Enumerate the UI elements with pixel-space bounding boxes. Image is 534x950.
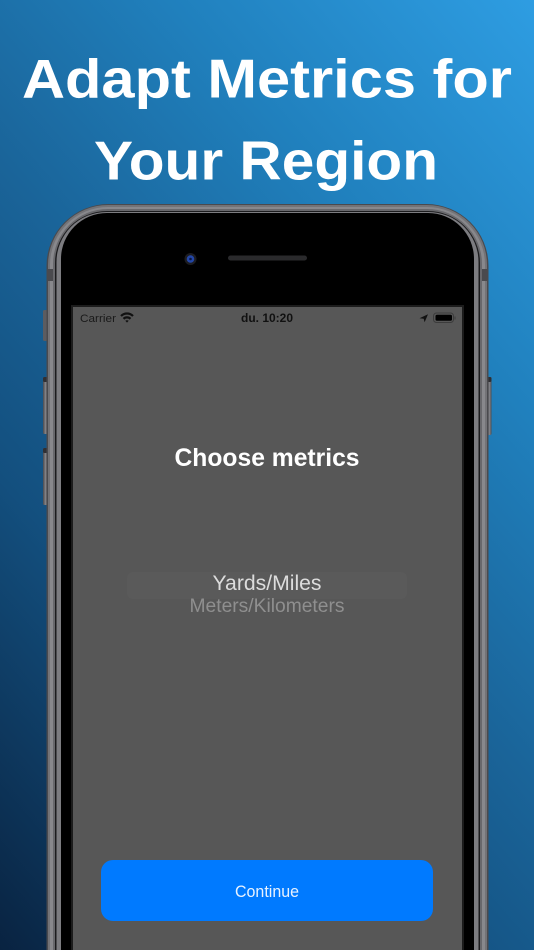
unselected option: Meters/Kilometers: [190, 595, 345, 617]
picker highlight: [127, 572, 407, 599]
title: Your Region: [94, 130, 438, 192]
continue button: Continue: [235, 883, 299, 901]
title: Adapt Metrics for: [22, 48, 512, 110]
battery icon: [434, 313, 456, 322]
metric picker: [127, 572, 407, 617]
phone frame: [46, 204, 488, 950]
heading: Choose metrics: [174, 444, 360, 472]
selected option: Yards/Miles: [212, 572, 322, 595]
wifi icon: [121, 314, 133, 323]
status bar carrier: Carrier: [80, 313, 116, 325]
side buttons: [43, 310, 492, 505]
front camera: [184, 253, 196, 265]
status bar time: du. 10:20: [241, 313, 293, 325]
title: [22, 48, 512, 192]
continue button: [101, 860, 433, 921]
speaker: [228, 256, 307, 260]
phone mockup: [43, 204, 492, 950]
screen: [71, 305, 464, 950]
location arrow icon: [420, 314, 428, 322]
